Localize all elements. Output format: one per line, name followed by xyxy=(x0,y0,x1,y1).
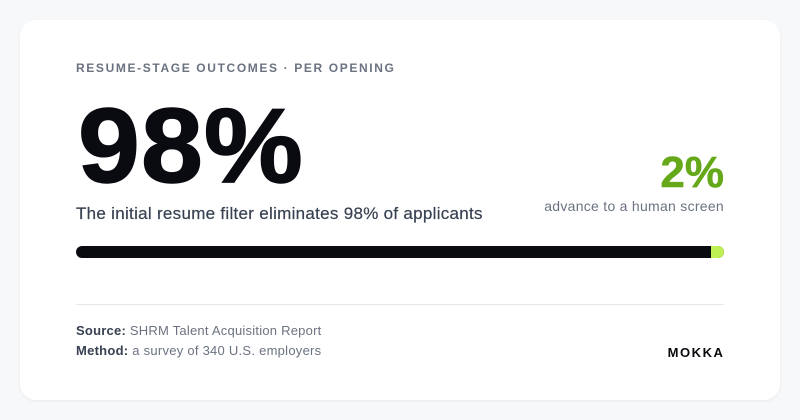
secondary stat description: advance to a human screen xyxy=(544,198,724,214)
source and method notes xyxy=(76,323,322,358)
footer divider xyxy=(76,304,724,305)
stat description: The initial resume filter eliminates 98% of applicants xyxy=(76,204,483,223)
brand wordmark: MOKKA xyxy=(668,345,724,360)
big stat: 98%: 98% xyxy=(78,87,304,205)
eyebrow heading: RESUME-STAGE OUTCOMES · PER OPENING xyxy=(76,61,396,75)
source line: Source: SHRM Talent Acquisition Report xyxy=(76,323,322,338)
bar segment: 2% advancing xyxy=(711,246,724,258)
method line: Method: a survey of 340 U.S. employers xyxy=(76,343,321,358)
progress bar: 98 / 2 split xyxy=(76,246,724,258)
secondary stat: 2%: 2% xyxy=(660,148,724,197)
